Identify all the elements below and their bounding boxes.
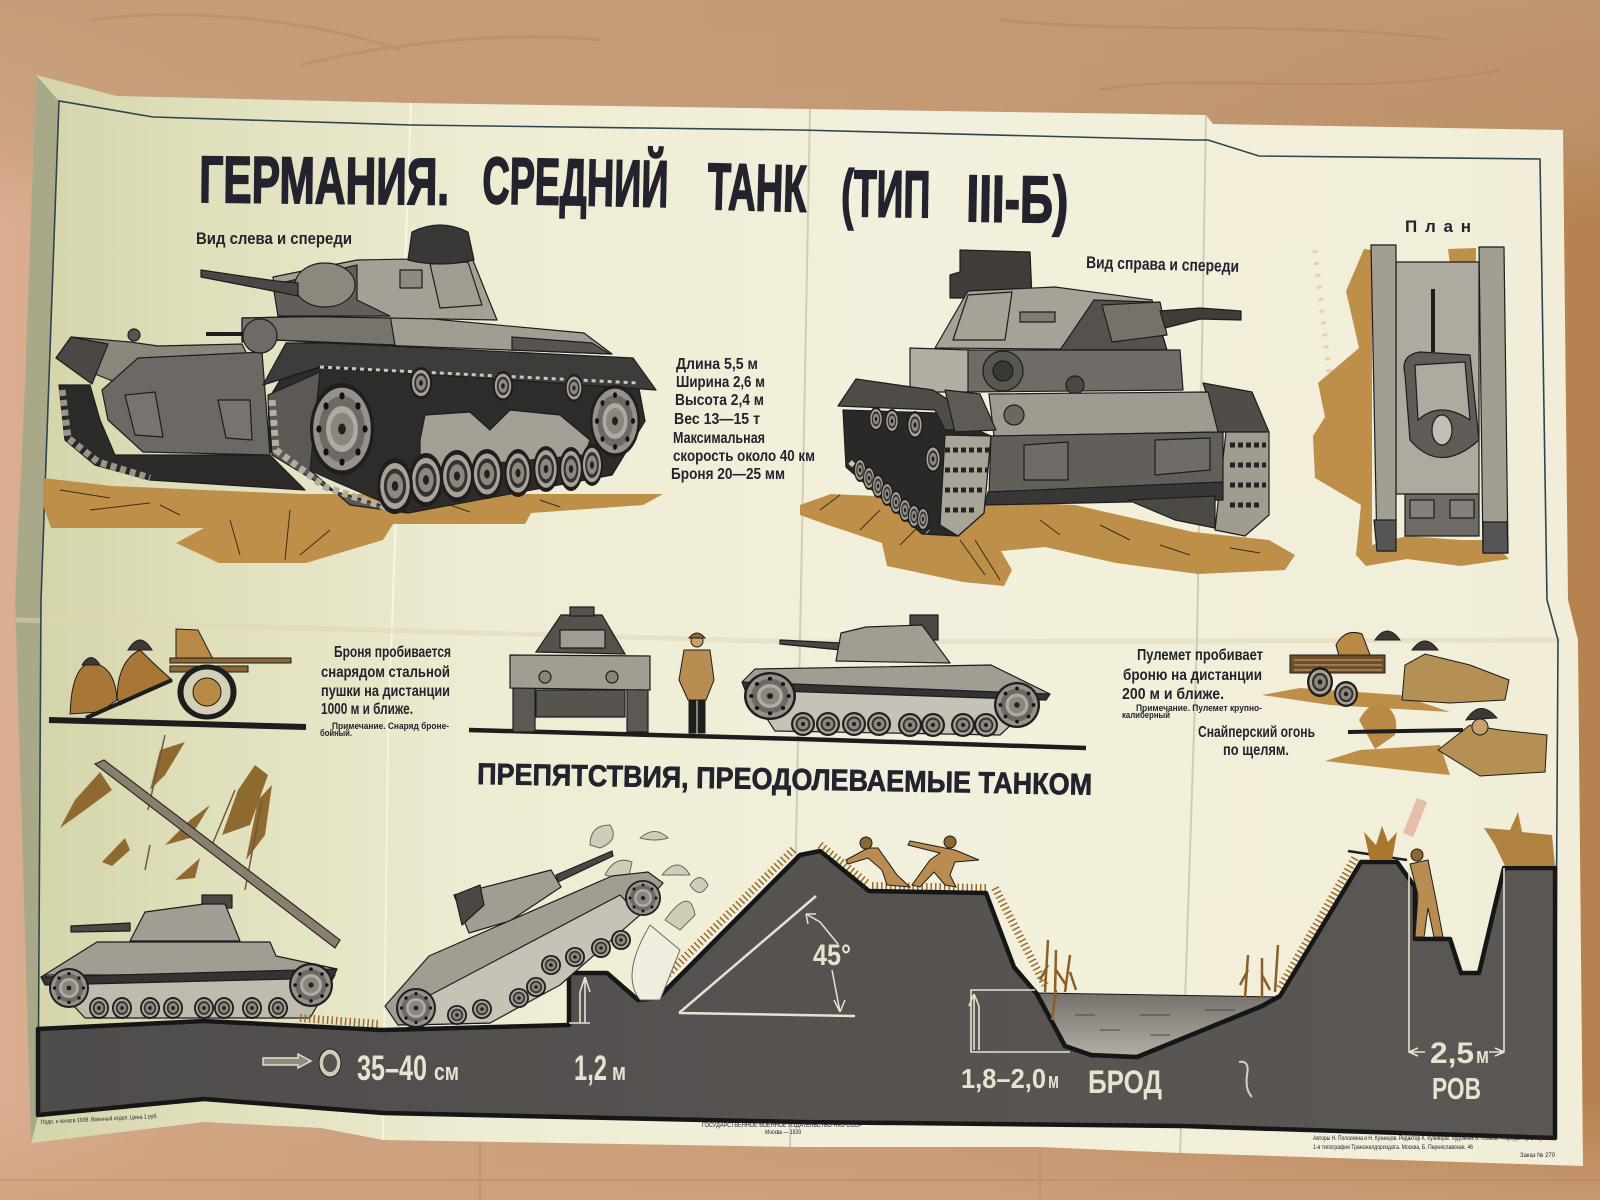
- value: 1.2 m: 1,2: [574, 1049, 607, 1088]
- gun: [780, 640, 841, 650]
- road wheels: [791, 712, 998, 737]
- tank specifications: Броня 20—25 мм: [671, 466, 785, 483]
- hull: [742, 665, 1050, 700]
- text: machine gun penetration: 200 м и ближе.: [1122, 686, 1224, 703]
- road wheels: [447, 930, 631, 1025]
- value: ditch width: м: [1476, 1043, 1489, 1068]
- rear track: [59, 385, 305, 490]
- fender: [263, 343, 656, 390]
- shield / gunner one: [1336, 632, 1372, 660]
- footer authors: [1313, 1135, 1555, 1159]
- cupola: [570, 607, 594, 616]
- rear hull upper deck: [56, 337, 262, 390]
- left track: [1371, 245, 1396, 551]
- turret: [836, 625, 950, 663]
- ford depth arrow: [969, 990, 1070, 1052]
- text: gun penetration: Примечание. Снаряд броне-: [332, 721, 449, 731]
- footer authors: Заказ № 270: [1520, 1152, 1555, 1159]
- left front fender: [838, 379, 994, 430]
- panel: tank plan view: [1313, 245, 1509, 566]
- text: machine gun penetration: Примечание. Пулемет крупно-: [1136, 703, 1262, 713]
- idler wheel: [590, 385, 640, 457]
- bush on trench edge: [1364, 826, 1397, 860]
- heading: obstacles: ПРЕПЯТСТВИЯ, ПРЕОДОЛЕВАЕМЫЕ ТАНКОМ: [477, 758, 1092, 802]
- ford bed outline: [1037, 994, 1280, 1057]
- turret: [130, 904, 240, 941]
- hull: [385, 872, 663, 1025]
- bush: [1359, 704, 1396, 749]
- front wheel: [625, 880, 661, 916]
- headlight: [1004, 405, 1024, 425]
- tree beyond trench: [1484, 812, 1555, 866]
- panel: tank left and front view: [43, 225, 663, 563]
- cupola: [950, 250, 1032, 298]
- hull side: [102, 352, 270, 455]
- tank specifications: [671, 356, 815, 483]
- value: ford depth: 1,8–2,0: [961, 1063, 1046, 1094]
- heading: left view: Вид слева и спереди: [196, 229, 352, 248]
- gunner bodies: [1402, 654, 1509, 703]
- turret from above: [1404, 352, 1479, 458]
- value: ford depth: м: [1048, 1068, 1059, 1093]
- fallen tree: [60, 735, 340, 948]
- panel: anti-tank gun crew: [49, 629, 306, 727]
- text: machine gun penetration: калиберный: [1122, 710, 1170, 720]
- water ripples: [1075, 1010, 1235, 1035]
- ground line under tank and soldier: [469, 730, 1086, 748]
- soil scratches: [60, 490, 560, 560]
- gun from above: [1431, 289, 1435, 352]
- lower hull: [989, 432, 1223, 494]
- text: machine gun penetration: броню на дистанции: [1123, 667, 1262, 684]
- gun wheel: [178, 665, 236, 719]
- soil scratches: [820, 495, 1260, 580]
- fender: [742, 682, 1050, 700]
- text: machine gun penetration: по щелям.: [1223, 742, 1289, 759]
- rear wheel: [396, 988, 436, 1028]
- right track: [1479, 247, 1508, 553]
- title: [199, 142, 1069, 237]
- step height arrow: [569, 977, 590, 1023]
- label 45 degrees: 45°: [813, 939, 851, 972]
- text: gun penetration: снарядом стальной: [321, 664, 450, 681]
- terrain cross-section: [38, 845, 1555, 1138]
- turret: [454, 870, 561, 933]
- helmets: [82, 640, 152, 665]
- value: 35-40 cm: см: [434, 1059, 459, 1086]
- label: ford: БРОД: [1088, 1064, 1162, 1100]
- upper hull: [910, 348, 970, 392]
- soil around plan: [1313, 249, 1509, 566]
- gun mantlet: [295, 263, 355, 307]
- gun barrel: [1160, 308, 1241, 328]
- branches: [145, 735, 262, 890]
- road wheels: [89, 997, 288, 1019]
- road wheels: [377, 444, 603, 514]
- soil under right tank: [800, 494, 1295, 586]
- tracks: [513, 686, 648, 732]
- gun: [556, 851, 613, 882]
- tank specifications: Ширина 2,6 м: [676, 374, 765, 391]
- obstacle: tank on flat ground: [41, 895, 337, 1019]
- tank specifications: Высота 2,4 м: [675, 392, 764, 409]
- hull glacis: [989, 392, 1218, 436]
- gun barrel: [170, 658, 291, 672]
- scale: tank front view: [510, 607, 650, 732]
- turret: [273, 258, 497, 320]
- text: gun penetration: Броня пробивается: [334, 644, 451, 661]
- panel: tank right and front view: [800, 250, 1295, 586]
- text: machine gun penetration: Пулемет пробивает: [1137, 647, 1263, 664]
- panel: machine gun crew: [1262, 631, 1509, 712]
- gun: [71, 923, 130, 932]
- title: СРЕДНИЙ: [482, 142, 669, 221]
- footer publisher: [702, 1122, 862, 1136]
- value: 35-40 cm: 35–40: [357, 1049, 427, 1088]
- turret: [935, 287, 1167, 350]
- helmets: [1375, 631, 1438, 650]
- hull ball mount: [243, 319, 277, 353]
- value: ditch width: 2,5: [1430, 1037, 1474, 1070]
- rear hull box: [56, 337, 108, 384]
- earth mass: [38, 851, 1555, 1138]
- 45 degree triangle: [679, 896, 855, 1016]
- reeds right of ford: [1240, 945, 1278, 998]
- gun barrel: [1290, 655, 1385, 673]
- reeds left of ford: [1040, 940, 1076, 1020]
- cupola: [910, 615, 938, 640]
- text: machine gun penetration: Снайперский огонь: [1198, 724, 1315, 741]
- panel: sniper: [1325, 704, 1547, 776]
- fender: [41, 969, 337, 985]
- heading: right view: Вид справа и спереди: [1086, 253, 1239, 276]
- return rollers: [869, 407, 941, 473]
- soldier crouching: [846, 848, 910, 887]
- ditch width arrows: [1409, 868, 1504, 1056]
- leaves: [60, 742, 272, 880]
- lower hull: [536, 690, 625, 717]
- cupola: [455, 885, 484, 925]
- ground: [1325, 745, 1450, 775]
- hull: [41, 942, 337, 980]
- log: [95, 760, 340, 948]
- sniper body: [1438, 725, 1547, 776]
- label: ditch: РОВ: [1432, 1071, 1481, 1106]
- soldier in trench: [1348, 849, 1443, 937]
- running gear dark mass: [268, 367, 645, 513]
- text: gun penetration: 1000 м и ближе.: [321, 701, 413, 718]
- turret: [536, 615, 625, 654]
- footer authors: 1-я типография Трансжелдориздата. Москва, Б. Переяславская, 46: [1313, 1144, 1473, 1151]
- gun trail: [86, 680, 172, 718]
- footer publisher: ГОСУДАРСТВЕННОЕ ВОЕННОЕ ИЗДАТЕЛЬСТВО НКО СССР: [702, 1122, 862, 1129]
- tank specifications: Вес 13—15 т: [674, 411, 760, 428]
- obstacle: tank climbing wall: [385, 825, 708, 1028]
- gun wheels: [1307, 667, 1358, 707]
- right fender: [1203, 383, 1269, 432]
- soldiers on hill top: [846, 836, 979, 887]
- heading: plan: План: [1405, 217, 1471, 236]
- suspension: [398, 895, 640, 1025]
- wheel height arrow and wheel: [263, 1049, 341, 1077]
- footer publisher: Москва — 1939: [765, 1129, 801, 1136]
- value: 1.2 m: м: [612, 1059, 626, 1086]
- grass on slopes: [300, 845, 1355, 1024]
- hull: [510, 655, 650, 690]
- upper hull: [242, 315, 612, 354]
- gun ground line: [49, 720, 306, 727]
- footer left print note: Подп. к печати 1939. Военный отдел. Цена 1 руб.: [41, 1113, 158, 1126]
- hull from above: [1396, 262, 1479, 494]
- hull belly: [985, 482, 1223, 505]
- angle arrows: [806, 914, 845, 1012]
- small road wheels: [854, 458, 929, 531]
- left fender plate: [945, 390, 996, 432]
- suspension: [745, 685, 1040, 735]
- commander cupola: [408, 225, 474, 264]
- gun shield: [176, 629, 214, 661]
- gun mantlet: [1102, 302, 1167, 342]
- curled left margin of the sheet: [15, 75, 59, 1143]
- helmet: [1466, 708, 1497, 720]
- text: gun penetration: пушки на дистанции: [321, 683, 450, 700]
- rear deck: [1405, 494, 1479, 536]
- scale: tank side view: [742, 615, 1050, 737]
- scale: standing soldier: [679, 633, 714, 733]
- cupola: [202, 895, 232, 908]
- left track and wheels: [843, 410, 991, 536]
- soil under left tank: [43, 478, 663, 563]
- soldier seated front: [117, 650, 172, 705]
- gun barrel: [201, 270, 298, 296]
- turret hatch: [430, 262, 482, 308]
- explosion puffs: [590, 825, 708, 1000]
- text: gun penetration: [320, 644, 451, 738]
- soldier throwing grenade: [908, 841, 979, 887]
- text: gun penetration: бойный.: [320, 728, 352, 738]
- title: ТАНК: [707, 149, 808, 226]
- text: machine gun penetration: [1122, 647, 1315, 759]
- tank specifications: скорость около 40 км: [673, 448, 815, 465]
- drive sprocket: [310, 383, 374, 475]
- return rollers: [410, 367, 583, 402]
- turret hatch: [953, 292, 1012, 340]
- track front: [268, 372, 408, 513]
- title: III-Б): [966, 161, 1069, 237]
- ground tuft: [1262, 688, 1450, 712]
- tank specifications: Длина 5,5 м: [676, 356, 758, 373]
- suspension light panel: [420, 410, 590, 470]
- title: ГЕРМАНИЯ.: [199, 142, 450, 219]
- soldier seated rear: [70, 663, 117, 714]
- suspension: [45, 975, 335, 1018]
- rifle: [1348, 730, 1463, 732]
- title: (ТИП: [841, 156, 931, 231]
- right track: [1215, 432, 1269, 536]
- ford water: [1037, 993, 1278, 1057]
- tank specifications: Максимальная: [673, 430, 765, 447]
- paper tear: [1239, 1062, 1252, 1097]
